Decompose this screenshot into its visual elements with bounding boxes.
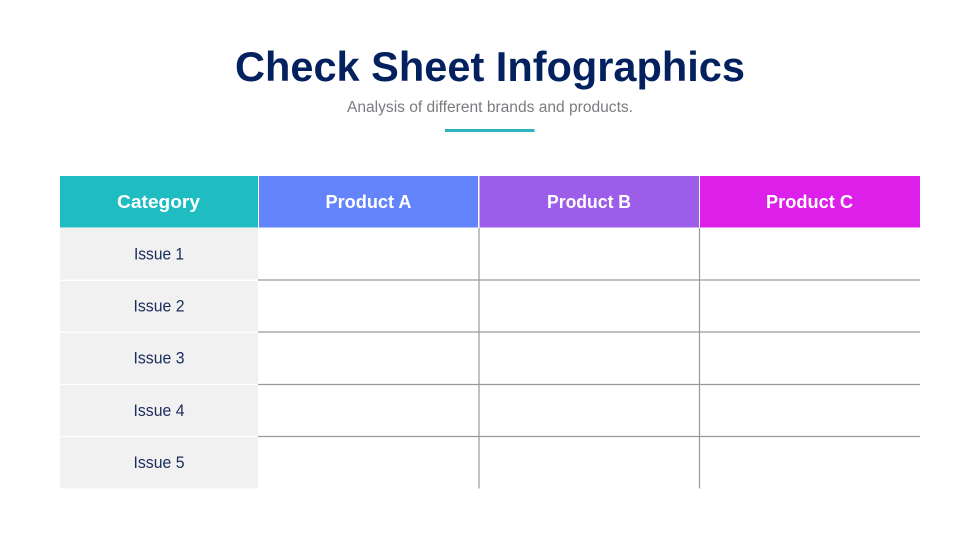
header: product C: Product C [766,191,853,212]
header: category: Category [117,191,201,212]
row label: issue 2: Issue 2 [134,298,184,316]
row label: issue 1: Issue 1 [134,246,184,264]
check sheet table [60,176,920,488]
row label: issue 1 [60,228,258,280]
empty check grid [258,228,920,488]
header: product B [480,176,699,228]
row label: issue 4 [60,385,258,436]
row label: issue 4: Issue 4 [134,402,184,420]
row label: issue 5: Issue 5 [134,454,184,472]
accent underline [445,129,534,132]
subtitle: Analysis of different brands and products. [347,99,633,116]
header: category [60,176,258,228]
row label: issue 3 [60,333,258,384]
header: product C [700,176,920,228]
row label: issue 3: Issue 3 [134,350,184,368]
row label: issue 5 [60,437,258,488]
row label: issue 2 [60,281,258,332]
header: product A [259,176,478,228]
header: product A: Product A [326,191,412,212]
header: product B: Product B [547,191,631,212]
title: Check Sheet Infographics [235,43,745,90]
